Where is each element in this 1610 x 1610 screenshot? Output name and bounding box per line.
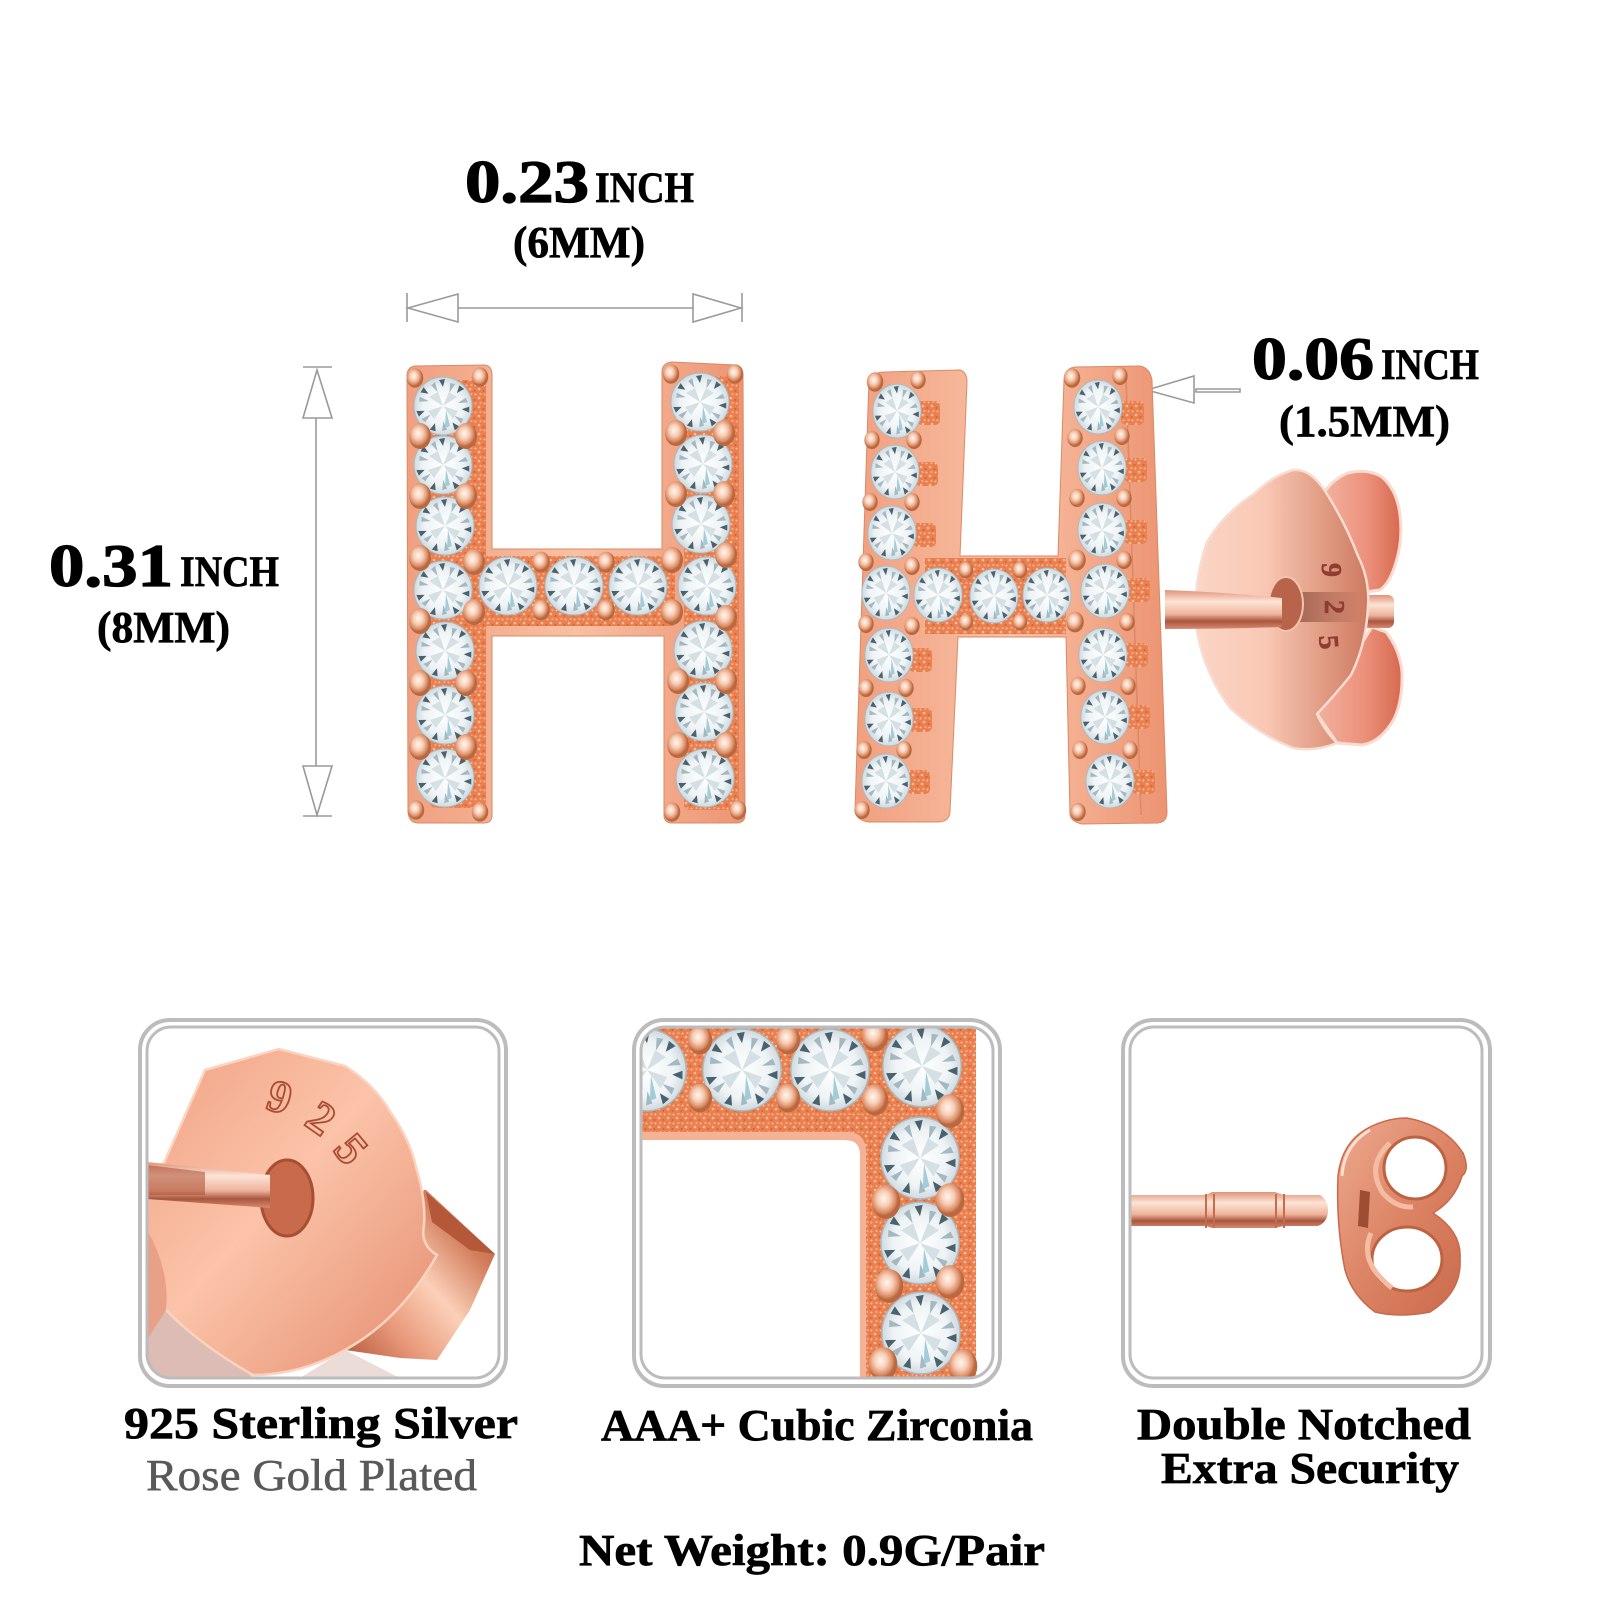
stamped 925: 9: [261, 1069, 299, 1125]
stamped 925: [266, 1080, 368, 1164]
stamped 925 mark: [1312, 563, 1349, 651]
panel: double notched post and back: [1129, 1118, 1466, 1315]
post shadow on disc: [1300, 592, 1362, 622]
width label: 0.23 inch (6 mm): (6MM): [513, 218, 645, 267]
stamped 925: 5: [324, 1124, 378, 1174]
earring front view: H with stones: [407, 362, 746, 823]
butterfly back: [1338, 1118, 1466, 1315]
thickness label: 0.06 inch (1.5 mm): 0.06: [1252, 326, 1374, 392]
earring angled view: H with stones: [854, 366, 1167, 824]
prongs: [854, 367, 1138, 821]
stones: crossbar: [479, 557, 667, 615]
caption: Double Notched, Extra Security: Extra Security: [1161, 1444, 1459, 1493]
lower ear of back: [1317, 627, 1402, 745]
stamped 925: 2: [297, 1090, 345, 1145]
hole: [261, 1160, 313, 1236]
speckled setting bed: [430, 376, 739, 810]
panel: 925 sterling silver close-up: [140, 1020, 506, 1386]
inner crescents: [1376, 1143, 1413, 1207]
stones: right column: [671, 373, 736, 807]
caption: net weight: Net Weight: 0.9G/Pair: [579, 1526, 1045, 1575]
thickness arrow: [1147, 376, 1240, 403]
width label: 0.23 inch (6 mm): [465, 149, 694, 267]
height label: 0.31 inch (8 mm): INCH: [180, 549, 279, 596]
stones: [862, 380, 1134, 808]
prongs: [407, 364, 746, 822]
caption: 925 Sterling Silver, Rose Gold Plated: Rose Gold Plated: [146, 1451, 477, 1500]
upper ear of back: [1325, 471, 1401, 592]
thickness label: 0.06 inch (1.5 mm): [1252, 326, 1479, 446]
height label: 0.31 inch (8 mm): (8MM): [97, 603, 230, 652]
thickness label: 0.06 inch (1.5 mm): (1.5MM): [1279, 397, 1450, 446]
width dimension arrow: [407, 293, 742, 322]
stones: left column: [414, 377, 474, 807]
height label: 0.31 inch (8 mm): [49, 533, 279, 652]
close-up of back disc: [147, 1049, 495, 1380]
post: [147, 1162, 270, 1208]
orange settings: [907, 401, 1155, 794]
height label: 0.31 inch (8 mm): 0.31: [49, 533, 173, 599]
disc body: [147, 1049, 437, 1375]
caption: Double Notched, Extra Security: Double Notched: [1137, 1400, 1471, 1449]
caption: AAA+ Cubic Zirconia: AAA+ Cubic Zirconia: [601, 1401, 1033, 1450]
post with notches: [1129, 1192, 1328, 1228]
thickness label: 0.06 inch (1.5 mm): INCH: [1381, 342, 1479, 389]
caption: Double Notched, Extra Security: [1137, 1400, 1471, 1493]
width label: 0.23 inch (6 mm): 0.23: [465, 149, 589, 215]
panel: cubic zirconia close-up: [608, 1020, 1000, 1386]
stamped 925 mark: 2: [1318, 600, 1349, 614]
post end beyond disc: [1360, 595, 1394, 628]
height dimension arrow: [303, 367, 332, 816]
stamped 925 mark: 5: [1312, 634, 1344, 651]
stamped 925 mark: 9: [1315, 563, 1346, 577]
width label: 0.23 inch (6 mm): INCH: [595, 165, 694, 212]
post hole: [1269, 577, 1303, 631]
caption: 925 Sterling Silver, Rose Gold Plated: [124, 1399, 518, 1500]
back disc: [1196, 470, 1368, 749]
close-up of stones: [642, 1028, 978, 1376]
post: [1165, 590, 1282, 629]
earring back and post: [1165, 470, 1402, 749]
caption: 925 Sterling Silver, Rose Gold Plated: 925 Sterling Silver: [124, 1399, 518, 1448]
back ear: [345, 1190, 495, 1360]
